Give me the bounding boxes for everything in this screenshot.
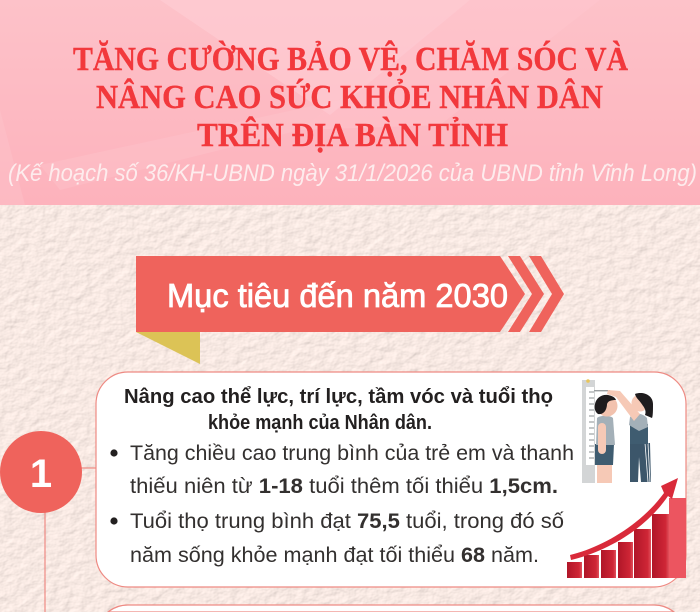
panel: goal 2 (top edge) xyxy=(108,605,674,612)
icon: rising bar chart xyxy=(567,478,686,578)
title xyxy=(73,40,628,154)
bullet: life expectancy target xyxy=(110,510,564,567)
trend arrow xyxy=(570,478,678,560)
banner body xyxy=(136,256,525,332)
card heading: Nâng cao thể lực, trí lực, tầm vóc và tuổi thọ xyxy=(124,385,553,408)
bullet: life expectancy target: năm sống khỏe mạnh đạt tối thiểu 68 năm. xyxy=(130,544,539,567)
banner fold xyxy=(136,332,200,364)
panel: goal 1 xyxy=(96,372,686,587)
title: TĂNG CƯỜNG BẢO VỆ, CHĂM SÓC VÀ xyxy=(73,40,628,78)
number badge 1: 1 xyxy=(30,452,52,496)
title: NÂNG CAO SỨC KHỎE NHÂN DÂN xyxy=(96,78,603,116)
icon: child height measurement xyxy=(582,379,653,483)
banner label: Mục tiêu đến năm 2030 xyxy=(167,277,508,314)
adult xyxy=(630,443,651,482)
child xyxy=(597,463,612,483)
card background xyxy=(96,372,686,587)
connector lines xyxy=(45,468,96,612)
bullet: height target: Tăng chiều cao trung bình của trẻ em và thanh xyxy=(130,442,574,465)
title: TRÊN ĐỊA BÀN TỈNH xyxy=(197,116,508,154)
card heading: khỏe mạnh của Nhân dân. xyxy=(208,411,432,434)
bullet: height target: thiếu niên từ 1-18 tuổi thêm tối thiểu 1,5cm. xyxy=(130,475,558,498)
bullet: height target xyxy=(110,442,574,498)
card heading xyxy=(124,385,553,434)
number badge 1 xyxy=(0,431,82,513)
arrow chevrons xyxy=(508,256,564,332)
header band xyxy=(0,0,700,205)
banner: goal heading xyxy=(136,256,564,364)
bullet: life expectancy target: Tuổi thọ trung bình đạt 75,5 tuổi, trong đó số xyxy=(130,510,564,533)
